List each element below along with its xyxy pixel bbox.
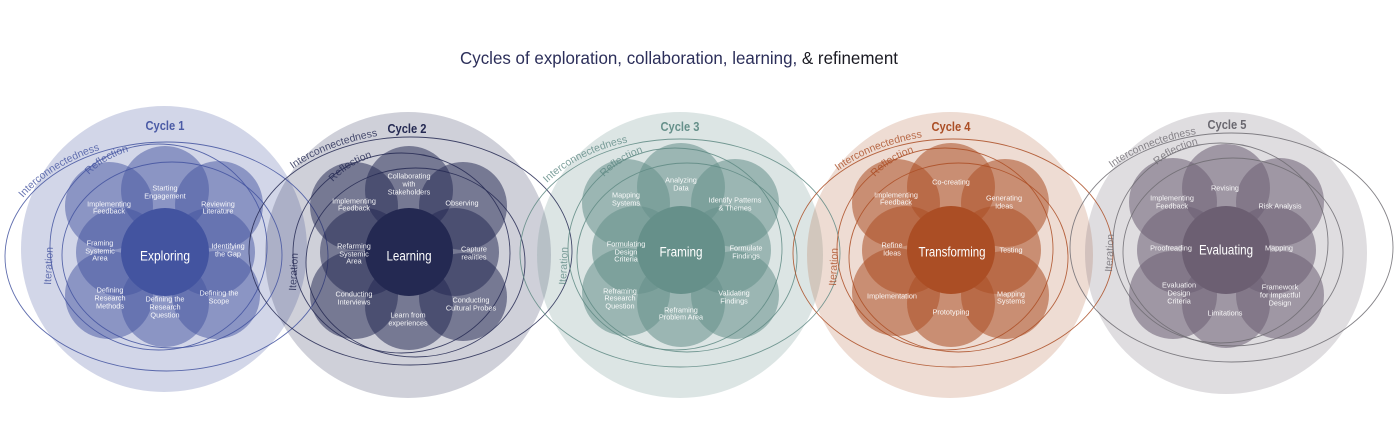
- petal labels: cycle 1: Defining: [97, 286, 123, 294]
- petal labels: cycle 5: Evaluation: [1162, 280, 1196, 290]
- petals: cycle 3: [582, 143, 779, 347]
- petal labels: cycle 2: Interviews: [338, 298, 371, 306]
- petal labels: cycle 4: Ideas: [883, 248, 901, 258]
- label: Iteration: Iteration: [557, 246, 571, 285]
- petal labels: cycle 2: Systemic: [339, 250, 369, 258]
- petals: cycle 5: [1129, 144, 1324, 348]
- orbit ellipses: cycle 5: [1070, 133, 1393, 362]
- petal labels: cycle 2: Collaborating: [388, 172, 430, 180]
- petal labels: cycle 4: Refine: [881, 240, 903, 250]
- panel: cycle 5: [1070, 118, 1394, 362]
- petal labels: cycle 5: [1150, 184, 1302, 318]
- orbit ellipses: cycle 2: [249, 137, 572, 365]
- petal labels: cycle 3: Criteria: [614, 254, 639, 264]
- petal labels: cycle 4: Co-creating: [932, 178, 970, 186]
- petal labels: cycle 1: Implementing: [87, 200, 131, 208]
- petal labels: cycle 1: Reviewing: [201, 200, 235, 208]
- petal labels: cycle 2: Implementing: [332, 196, 376, 206]
- petal labels: cycle 1: Defining the: [200, 288, 238, 298]
- petal labels: cycle 3: Findings: [720, 296, 748, 306]
- disc: cycle 1: [21, 106, 307, 392]
- petal labels: cycle 3: Analyzing: [665, 176, 697, 184]
- label: Reflection: Reflection: [870, 148, 914, 176]
- petal labels: cycle 3: Mapping: [612, 190, 640, 200]
- petal labels: cycle 3: Formulating: [607, 240, 645, 248]
- centre circle: Exploring: [121, 208, 209, 296]
- petal labels: cycle 4: [867, 178, 1025, 316]
- disc: cycle 4: [807, 112, 1093, 398]
- petal labels: cycle 1: Methods: [96, 302, 124, 310]
- petal labels: cycle 1: Defining the: [146, 294, 184, 304]
- centre label: Transforming: Transforming: [918, 244, 986, 260]
- petal labels: cycle 3: [603, 176, 762, 322]
- petals: cycle 4: [852, 143, 1049, 347]
- petal labels: cycle 3: Findings: [732, 252, 760, 260]
- label: Iteration: Iteration: [42, 246, 56, 285]
- panel: cycle 3: [520, 120, 840, 368]
- disc: cycle 3: [537, 112, 823, 398]
- petal labels: cycle 4: Systems: [997, 296, 1025, 306]
- label: Reflection: Reflection: [84, 146, 128, 174]
- petal labels: cycle 2: realities: [461, 252, 487, 262]
- petal labels: cycle 5: for Impactful: [1260, 290, 1300, 300]
- petal labels: cycle 1: the Gap: [215, 250, 241, 258]
- petals: cycle 2: [310, 146, 507, 350]
- petal labels: cycle 1: Starting: [152, 184, 178, 192]
- petal labels: cycle 3: Data: [673, 184, 690, 192]
- petal labels: cycle 4: Testing: [999, 246, 1023, 254]
- heading: Cycle 1: Cycle 1: [146, 119, 185, 133]
- petal labels: cycle 3: Systems: [612, 198, 640, 208]
- petal labels: cycle 2: Conducting: [453, 296, 489, 304]
- centre label: Framing: Framing: [660, 244, 702, 260]
- disc: cycle 2: [265, 112, 551, 398]
- petal labels: cycle 3: Research: [604, 294, 636, 302]
- heading: Cycle 5: Cycle 5: [1208, 118, 1247, 132]
- petal labels: cycle 3: & Themes: [718, 204, 752, 212]
- petal labels: cycle 1: Literature: [203, 206, 233, 216]
- petal labels: cycle 5: Mapping: [1265, 244, 1293, 252]
- petal labels: cycle 5: Implementing: [1150, 194, 1194, 202]
- petal labels: cycle 1: Area: [92, 254, 109, 262]
- label: Iteration: Iteration: [287, 252, 301, 291]
- label: Reflection: Reflection: [328, 152, 372, 182]
- petal labels: cycle 5: Design: [1269, 298, 1291, 308]
- petal labels: cycle 3: Reframing: [664, 306, 698, 314]
- petal labels: cycle 1: Framing: [87, 238, 113, 248]
- panel: cycle 4: [792, 120, 1114, 368]
- centre label: Evaluating: Evaluating: [1199, 242, 1253, 258]
- petal labels: cycle 2: Observing: [445, 198, 479, 208]
- petal labels: cycle 1: [85, 184, 245, 320]
- petal labels: cycle 5: Proofreading: [1150, 244, 1192, 252]
- petal labels: cycle 4: Feedback: [880, 198, 912, 206]
- orbit ellipses: cycle 3: [520, 139, 840, 367]
- title: Cycles of exploration, collaboration, learning, & refinement: [460, 48, 898, 68]
- petal labels: cycle 2: Area: [346, 256, 363, 266]
- petal labels: cycle 2: [332, 172, 496, 328]
- petal labels: cycle 4: Prototyping: [933, 308, 969, 316]
- orbit ellipses: cycle 4: [793, 139, 1113, 367]
- centre circle: Framing: [637, 206, 725, 294]
- centre label: Exploring: Exploring: [140, 248, 190, 264]
- petal labels: cycle 2: Capture: [461, 244, 487, 254]
- heading: Cycle 3: Cycle 3: [660, 120, 700, 134]
- petal labels: cycle 4: Ideas: [995, 202, 1013, 210]
- petal labels: cycle 1: Feedback: [93, 206, 125, 216]
- petal labels: cycle 4: Implementing: [874, 190, 918, 200]
- petal labels: cycle 3: Problem Area: [659, 312, 704, 322]
- centre label: Learning: Learning: [386, 248, 432, 264]
- petal labels: cycle 2: Conducting: [336, 290, 372, 298]
- petal labels: cycle 1: Research: [94, 294, 126, 302]
- centre circle: Learning: [365, 208, 453, 296]
- petal labels: cycle 3: Design: [615, 248, 637, 256]
- petal labels: cycle 3: Identify Patterns: [709, 196, 762, 204]
- petal labels: cycle 5: Risk Analysis: [1259, 202, 1302, 210]
- petal labels: cycle 5: Design: [1168, 288, 1190, 298]
- petal labels: cycle 1: Scope: [209, 296, 229, 306]
- heading: Cycle 4: Cycle 4: [932, 120, 971, 134]
- label: Reflection: Reflection: [600, 148, 642, 176]
- label: Interconnectedness: Interconnectedness: [834, 132, 922, 170]
- petals: cycle 1: [65, 146, 263, 347]
- background discs of all five cycles: [21, 106, 1367, 398]
- orbit ellipses: cycle 1: [5, 142, 328, 371]
- petal labels: cycle 2: with: [402, 180, 415, 188]
- label: Iteration: Iteration: [827, 247, 841, 286]
- petal labels: cycle 2: experiences: [388, 318, 428, 328]
- label: Interconnectedness: Interconnectedness: [18, 145, 99, 198]
- petal labels: cycle 4: Mapping: [997, 290, 1025, 298]
- petal labels: cycle 5: Criteria: [1167, 296, 1192, 306]
- label: Interconnectedness: Interconnectedness: [542, 137, 627, 182]
- petal labels: cycle 1: Research: [149, 302, 181, 312]
- petal labels: cycle 3: Validating: [718, 288, 750, 298]
- heading: Cycle 2: Cycle 2: [388, 122, 427, 136]
- petal labels: cycle 2: Stakeholders: [388, 188, 431, 196]
- petal labels: cycle 1: Identifying: [211, 242, 245, 250]
- petal labels: cycle 5: Framework: [1262, 282, 1299, 292]
- centre circle: Transforming: [907, 206, 995, 294]
- petal labels: cycle 1: Engagement: [144, 192, 186, 200]
- centre circle: Evaluating: [1182, 206, 1270, 294]
- petal labels: cycle 1: Systemic: [85, 246, 115, 256]
- petal labels: cycle 4: Generating: [986, 194, 1022, 202]
- label: Interconnectedness: Interconnectedness: [290, 130, 377, 168]
- petal labels: cycle 5: Limitations: [1208, 308, 1243, 318]
- petal labels: cycle 5: Revising: [1211, 184, 1239, 192]
- label: Interconnectedness: Interconnectedness: [1108, 128, 1196, 168]
- petal labels: cycle 2: Learn from: [390, 310, 426, 320]
- petal labels: cycle 4: Implementation: [867, 292, 917, 300]
- petal labels: cycle 5: Feedback: [1156, 202, 1188, 210]
- panel: cycle 1: [4, 119, 328, 372]
- panel: cycle 2: [248, 122, 572, 366]
- petal labels: cycle 3: Question: [605, 302, 635, 310]
- petal labels: cycle 2: Refarming: [337, 242, 371, 250]
- petal labels: cycle 3: Reframing: [603, 286, 637, 296]
- petal labels: cycle 2: Feedback: [338, 204, 370, 212]
- disc: cycle 5: [1085, 112, 1367, 394]
- petal labels: cycle 3: Formulate: [730, 244, 762, 252]
- petal labels: cycle 2: Cultural Probes: [446, 304, 496, 312]
- label: Reflection: Reflection: [1153, 139, 1198, 164]
- label: Iteration: Iteration: [1103, 233, 1117, 272]
- petal labels: cycle 1: Question: [150, 310, 180, 320]
